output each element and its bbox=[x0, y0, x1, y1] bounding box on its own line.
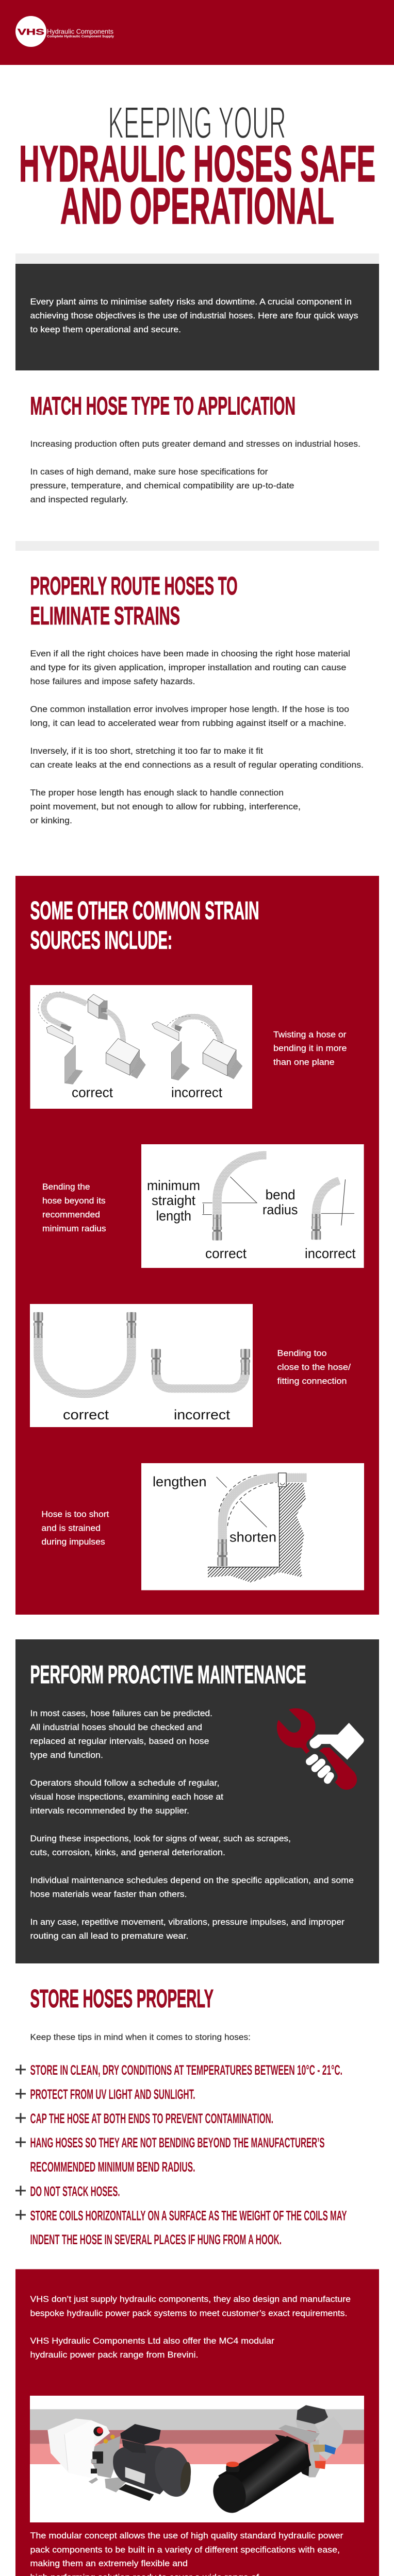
body text bbox=[30, 649, 364, 825]
heading: ELIMINATE STRAINS bbox=[30, 602, 180, 630]
label: shorten: shorten bbox=[229, 1529, 276, 1545]
body text: point movement, but not enough to allow for rubbing, interference, bbox=[30, 802, 301, 811]
label: correct: correct bbox=[72, 1085, 113, 1100]
intro text: achieving those objectives is the use of industrial hoses. Here are four quick ways bbox=[30, 311, 358, 320]
left power pack bbox=[47, 2418, 196, 2501]
body text: One common installation error involves improper hose length. If the hose is too bbox=[30, 705, 349, 714]
caption: twisting bbox=[273, 1030, 347, 1067]
body text: replaced at regular intervals, based on hose bbox=[30, 1737, 209, 1746]
logo: VHS letters: VHS bbox=[18, 27, 44, 37]
text: modular concept: making them an extremely flexible and bbox=[30, 2559, 188, 2568]
body text: cuts, corrosion, kinks, and general deterioration. bbox=[30, 1848, 225, 1857]
label: correct: correct bbox=[205, 1246, 247, 1261]
panel: proactive maintenance bbox=[15, 1639, 379, 1963]
image: power packs bbox=[30, 2396, 364, 2522]
caption: bending too close: fitting connection bbox=[277, 1377, 347, 1386]
label: bend radius bbox=[262, 1187, 298, 1217]
list of storage tips: RECOMMENDED MINIMUM BEND RADIUS. bbox=[30, 2159, 195, 2175]
icons: plus bullets bbox=[15, 2065, 26, 2219]
panel: other strain sources bbox=[15, 876, 379, 1615]
heading bbox=[30, 572, 237, 630]
caption: twisting: than one plane bbox=[273, 1058, 335, 1067]
heading: SOURCES INCLUDE: bbox=[30, 926, 172, 954]
body text: pressure, temperature, and chemical compatibility are up-to-date bbox=[30, 481, 294, 490]
label: correct: correct bbox=[63, 1407, 109, 1422]
section: store hoses bbox=[15, 1985, 347, 2247]
section: match hose type bbox=[30, 393, 360, 504]
caption: bending radius bbox=[42, 1182, 106, 1233]
body text: Operators should follow a schedule of regular, bbox=[30, 1778, 220, 1788]
text: about VHS: hydraulic power pack range from Brevini. bbox=[30, 2350, 198, 2360]
body text: and type for its given application, improper installation and routing can cause bbox=[30, 663, 347, 672]
label: minimum straight length: minimum bbox=[147, 1178, 200, 1193]
body text: In any case, repetitive movement, vibrations, pressure impulses, and improper bbox=[30, 1918, 345, 1927]
body text: and inspected regularly. bbox=[30, 495, 128, 504]
caption: bending radius: Bending the bbox=[42, 1182, 90, 1192]
body text: can create leaks at the end connections as a result of regular operating conditions. bbox=[30, 760, 364, 770]
logo: white circle bbox=[15, 16, 46, 47]
body text bbox=[30, 1709, 354, 1941]
caption: hose too short: and is strained bbox=[41, 1523, 101, 1533]
label: minimum straight length bbox=[147, 1178, 200, 1224]
label: incorrect: incorrect bbox=[305, 1246, 356, 1261]
caption: twisting: Twisting a hose or bbox=[273, 1030, 347, 1040]
body text: hose failures and impose safety hazards. bbox=[30, 677, 195, 686]
label: bend radius: radius bbox=[262, 1202, 298, 1217]
body text: or kinking. bbox=[30, 816, 72, 825]
panel: intro bbox=[15, 264, 379, 370]
text: modular concept bbox=[30, 2531, 343, 2576]
diagram: hose length bbox=[141, 1463, 364, 1590]
text: modular concept: pack components to be built in a variety of different specifications with ease, bbox=[30, 2545, 340, 2554]
text: modular concept: The modular concept allows the use of high quality standard hydraulic power bbox=[30, 2531, 343, 2540]
body text: routing can all lead to premature wear. bbox=[30, 1931, 189, 1941]
body text: visual hose inspections, examining each hose at bbox=[30, 1792, 223, 1802]
body text: All industrial hoses should be checked and bbox=[30, 1723, 202, 1732]
list of storage tips: DO NOT STACK HOSES. bbox=[30, 2183, 120, 2199]
intro line: Keep these tips in mind when it comes to storing hoses: bbox=[30, 2033, 251, 2042]
label: incorrect: incorrect bbox=[174, 1407, 231, 1422]
label: bend radius: bend bbox=[266, 1187, 296, 1202]
diagram: twisting hose bbox=[30, 985, 252, 1109]
logo: company name: Hydraulic Components bbox=[47, 28, 113, 35]
caption: hose too short: during impulses bbox=[41, 1537, 105, 1547]
intro text: Every plant aims to minimise safety risks and downtime. A crucial component in bbox=[30, 297, 352, 307]
text: about VHS: VHS don’t just supply hydraulic components, they also design and manufacture bbox=[30, 2295, 351, 2304]
body text: Inversely, if it is too short, stretching it too far to make it fit bbox=[30, 747, 263, 756]
intro text: to keep them operational and secure. bbox=[30, 325, 181, 334]
body text: long, it can lead to accelerated wear from rubbing against itself or a machine. bbox=[30, 719, 347, 728]
caption: bending too close bbox=[277, 1349, 351, 1386]
label: incorrect: incorrect bbox=[171, 1085, 222, 1100]
label: minimum straight length: straight bbox=[152, 1193, 195, 1208]
body text bbox=[30, 439, 360, 504]
body text: The proper hose length has enough slack to handle connection bbox=[30, 788, 284, 798]
body text: During these inspections, look for signs of wear, such as scrapes, bbox=[30, 1834, 291, 1843]
logo: tagline: Complete Hydraulic Component Supply bbox=[47, 35, 114, 38]
caption: bending radius: recommended bbox=[42, 1210, 100, 1219]
heading: STORE HOSES PROPERLY bbox=[30, 1985, 214, 2013]
body text: intervals recommended by the supplier. bbox=[30, 1806, 189, 1816]
caption: hose too short: Hose is too short bbox=[41, 1510, 109, 1519]
caption: bending radius: hose beyond its bbox=[42, 1196, 106, 1206]
body text: hose materials wear faster than others. bbox=[30, 1890, 187, 1899]
intro text bbox=[30, 297, 358, 334]
text: about VHS: VHS Hydraulic Components Ltd also offer the MC4 modular bbox=[30, 2336, 275, 2346]
text: about VHS: bespoke hydraulic power pack systems to meet customer’s exact requirements. bbox=[30, 2309, 348, 2318]
caption: bending too close: close to the hose/ bbox=[277, 1363, 351, 1372]
diagram: bend radius bbox=[141, 1144, 364, 1268]
caption: hose too short bbox=[41, 1510, 109, 1547]
icon: hand holding wrench bbox=[277, 1708, 364, 1790]
panel: power packs bbox=[15, 2269, 379, 2576]
caption: bending too close: Bending too bbox=[277, 1349, 327, 1358]
body text: Individual maintenance schedules depend on the specific application, and some bbox=[30, 1876, 354, 1885]
heading bbox=[30, 897, 259, 954]
diagram: bending near fitting bbox=[30, 1304, 253, 1427]
right power pack bbox=[208, 2405, 344, 2517]
body text: In most cases, hose failures can be predicted. bbox=[30, 1709, 212, 1718]
text: about VHS bbox=[30, 2295, 351, 2360]
list of storage tips: PROTECT FROM UV LIGHT AND SUNLIGHT. bbox=[30, 2087, 195, 2102]
body text: type and function. bbox=[30, 1751, 103, 1760]
caption: bending radius: minimum radius bbox=[42, 1224, 106, 1233]
body text: Even if all the right choices have been made in choosing the right hose material bbox=[30, 649, 350, 658]
label: lengthen: lengthen bbox=[153, 1474, 207, 1489]
body text: In cases of high demand, make sure hose specifications for bbox=[30, 467, 268, 477]
caption: twisting: bending it in more bbox=[273, 1044, 347, 1053]
header band with logo bbox=[0, 0, 394, 65]
label: minimum straight length: length bbox=[156, 1208, 191, 1224]
heading: PROPERLY ROUTE HOSES TO bbox=[30, 572, 237, 600]
body text: Increasing production often puts greater demand and stresses on industrial hoses. bbox=[30, 439, 360, 449]
list of storage tips bbox=[30, 2062, 347, 2247]
title bbox=[19, 98, 375, 234]
section: properly route hoses bbox=[30, 572, 364, 825]
